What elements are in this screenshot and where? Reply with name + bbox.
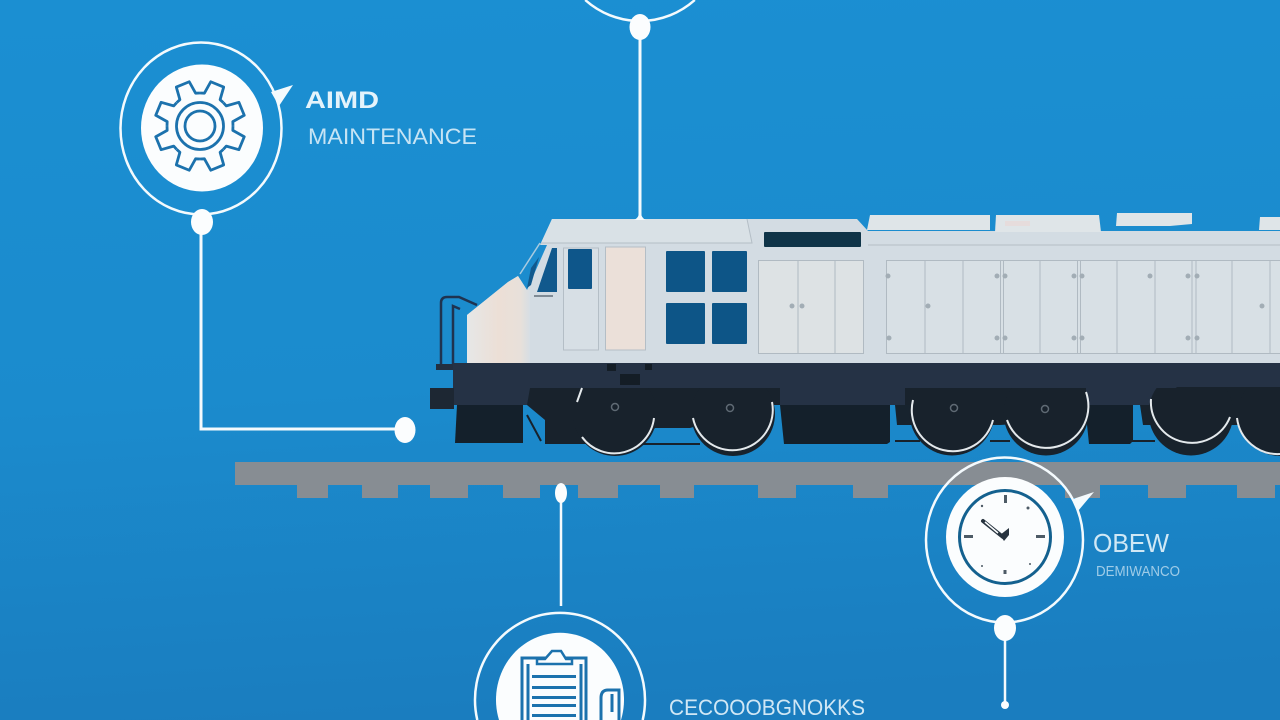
ring <box>475 613 645 720</box>
railway track <box>235 462 1280 498</box>
cab side windows <box>666 251 747 344</box>
label: checklist: CECOOOBGNOKKS <box>669 695 865 720</box>
connector line to train <box>201 225 405 429</box>
icon: clock <box>946 477 1064 597</box>
cream door <box>606 247 646 350</box>
label: maintenance <box>305 87 477 149</box>
connector dots <box>994 615 1016 709</box>
windshield <box>534 248 557 297</box>
icon: gear <box>141 64 263 192</box>
callout: maintenance gear <box>120 42 477 443</box>
label: maintenance: AIMD <box>305 87 379 114</box>
roof vent <box>764 232 861 247</box>
handrail <box>441 297 477 365</box>
underframe <box>453 363 1280 405</box>
callout: clock <box>926 458 1180 709</box>
roof band <box>541 219 752 243</box>
icon: clipboard <box>496 633 624 720</box>
locomotive <box>430 213 1280 456</box>
connector dot <box>555 483 567 503</box>
nose <box>467 276 530 363</box>
label: crew demand: DEMIWANCO <box>1096 563 1180 580</box>
connector dots <box>191 209 416 443</box>
long engine door panels <box>790 260 1280 354</box>
rear truck frames and wheels <box>895 387 1280 456</box>
callout: top connector <box>585 0 695 220</box>
handrail base <box>436 364 470 370</box>
engine door panel <box>758 260 864 354</box>
front truck frame and wheels <box>527 388 1155 456</box>
callout: checklist <box>475 483 865 720</box>
underframe fittings <box>607 364 652 385</box>
pale glass edge <box>520 243 540 274</box>
cab door with window <box>564 248 598 350</box>
label: crew demand: OBEW <box>1093 528 1169 558</box>
fuel tanks <box>455 405 1133 444</box>
ring with pointer <box>120 42 293 214</box>
front buffer <box>430 388 454 409</box>
label: maintenance: MAINTENANCE <box>308 124 477 149</box>
label: crew demand <box>1093 528 1180 580</box>
roof equipment <box>867 213 1280 232</box>
connector line <box>1004 636 1006 705</box>
ring with pointer <box>926 458 1094 622</box>
connector line <box>560 495 562 606</box>
locomotive body shell <box>467 219 1280 363</box>
